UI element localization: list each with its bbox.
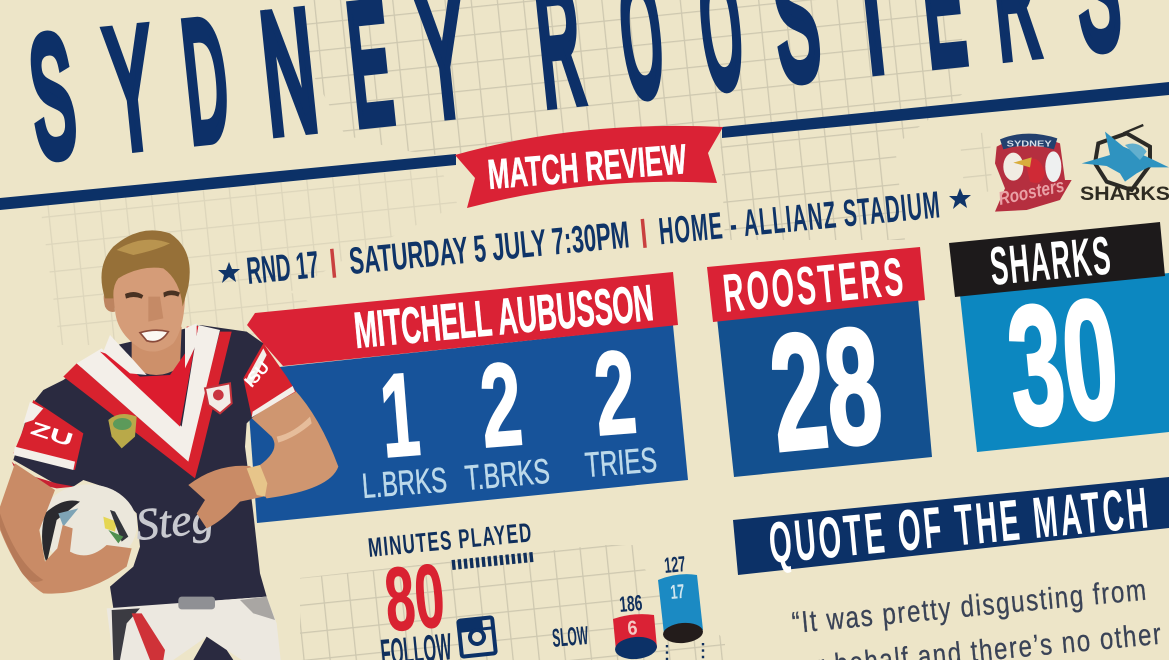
name banner (247, 272, 678, 366)
bar: Sharks: 17 (670, 581, 685, 604)
tries stat (584, 325, 658, 485)
title: Sydney Roosters (22, 0, 1127, 193)
logo: Sharks: SHARKS (1080, 184, 1169, 205)
bar: Sharks: 127 (663, 551, 686, 578)
eyes (125, 292, 143, 299)
jersey (13, 325, 293, 608)
icon: star right (949, 188, 971, 209)
bar: Sharks (658, 551, 704, 660)
match info line: RND 17 (245, 244, 321, 293)
bar: Roosters: 186 (618, 590, 643, 617)
bar: Roosters: 6 (627, 617, 638, 640)
social: follow instagram (379, 615, 498, 660)
player photo: Mitchell Aubusson (0, 230, 338, 660)
sleeve left (12, 400, 83, 488)
try breaks stat (463, 337, 551, 498)
icon: star left (218, 262, 240, 283)
badges (108, 383, 232, 448)
match info line (218, 184, 971, 293)
try breaks stat: T.BRKS (463, 452, 551, 498)
quote body (786, 574, 1164, 660)
logo: Sydney Roosters crest: SYDNEY (1007, 140, 1053, 149)
bar: Roosters (613, 590, 658, 660)
match info line: SATURDAY 5 JULY 7:30PM (347, 214, 631, 283)
logo: Sydney Roosters crest: Roosters (996, 175, 1066, 209)
chart: slow and fast play the balls: SLOW (551, 620, 590, 653)
ribbon: match review: MATCH REVIEW (486, 135, 688, 198)
title: Sydney Roosters: S (22, 0, 83, 192)
panel background blue (248, 325, 688, 523)
minutes value: 80 (381, 546, 449, 651)
belt buckle (178, 597, 215, 609)
right arm (247, 388, 338, 498)
left arm (0, 463, 132, 594)
nose shadow (148, 297, 163, 322)
head (101, 230, 190, 352)
divider line right (722, 82, 1169, 138)
neck (132, 327, 182, 375)
hair (101, 230, 190, 307)
panel: Mitchell Aubusson stats (247, 272, 688, 523)
minutes label: MINUTES PLAYED (367, 517, 534, 563)
sleeve right: ISU (241, 358, 273, 391)
line breaks stat: L.BRKS (361, 460, 448, 506)
tries stat: 2 (590, 325, 641, 460)
icon: instagram (456, 615, 498, 659)
logo: Sharks (1080, 125, 1169, 205)
panel: Roosters score (707, 247, 932, 486)
panel: quote of the match (733, 475, 1169, 660)
hatch bar (452, 557, 533, 565)
sleeve left: ZU (28, 417, 76, 451)
line breaks stat (361, 349, 448, 506)
shorts (107, 597, 281, 660)
logo: Sydney Roosters crest (995, 134, 1072, 212)
tries stat: TRIES (584, 440, 658, 485)
label: Roosters: ROOSTERS (720, 247, 908, 324)
chart: slow and fast play the balls (551, 551, 704, 660)
panel: Sharks score (949, 222, 1169, 463)
hand on chest (188, 466, 267, 528)
divider line left (0, 154, 456, 210)
stat: minutes played (367, 517, 534, 651)
score: 28: 28 (763, 292, 889, 486)
mouth (140, 330, 168, 342)
player name: MITCHELL AUBUSSON (352, 274, 656, 359)
line breaks stat: 1 (376, 349, 424, 483)
sponsor: Steg (133, 492, 216, 550)
sleeve right (241, 343, 296, 417)
quote banner (733, 477, 1169, 575)
jersey chevron (63, 323, 232, 478)
ball (40, 484, 137, 566)
try breaks stat: 2 (476, 337, 527, 472)
ribbon: match review (455, 126, 723, 208)
